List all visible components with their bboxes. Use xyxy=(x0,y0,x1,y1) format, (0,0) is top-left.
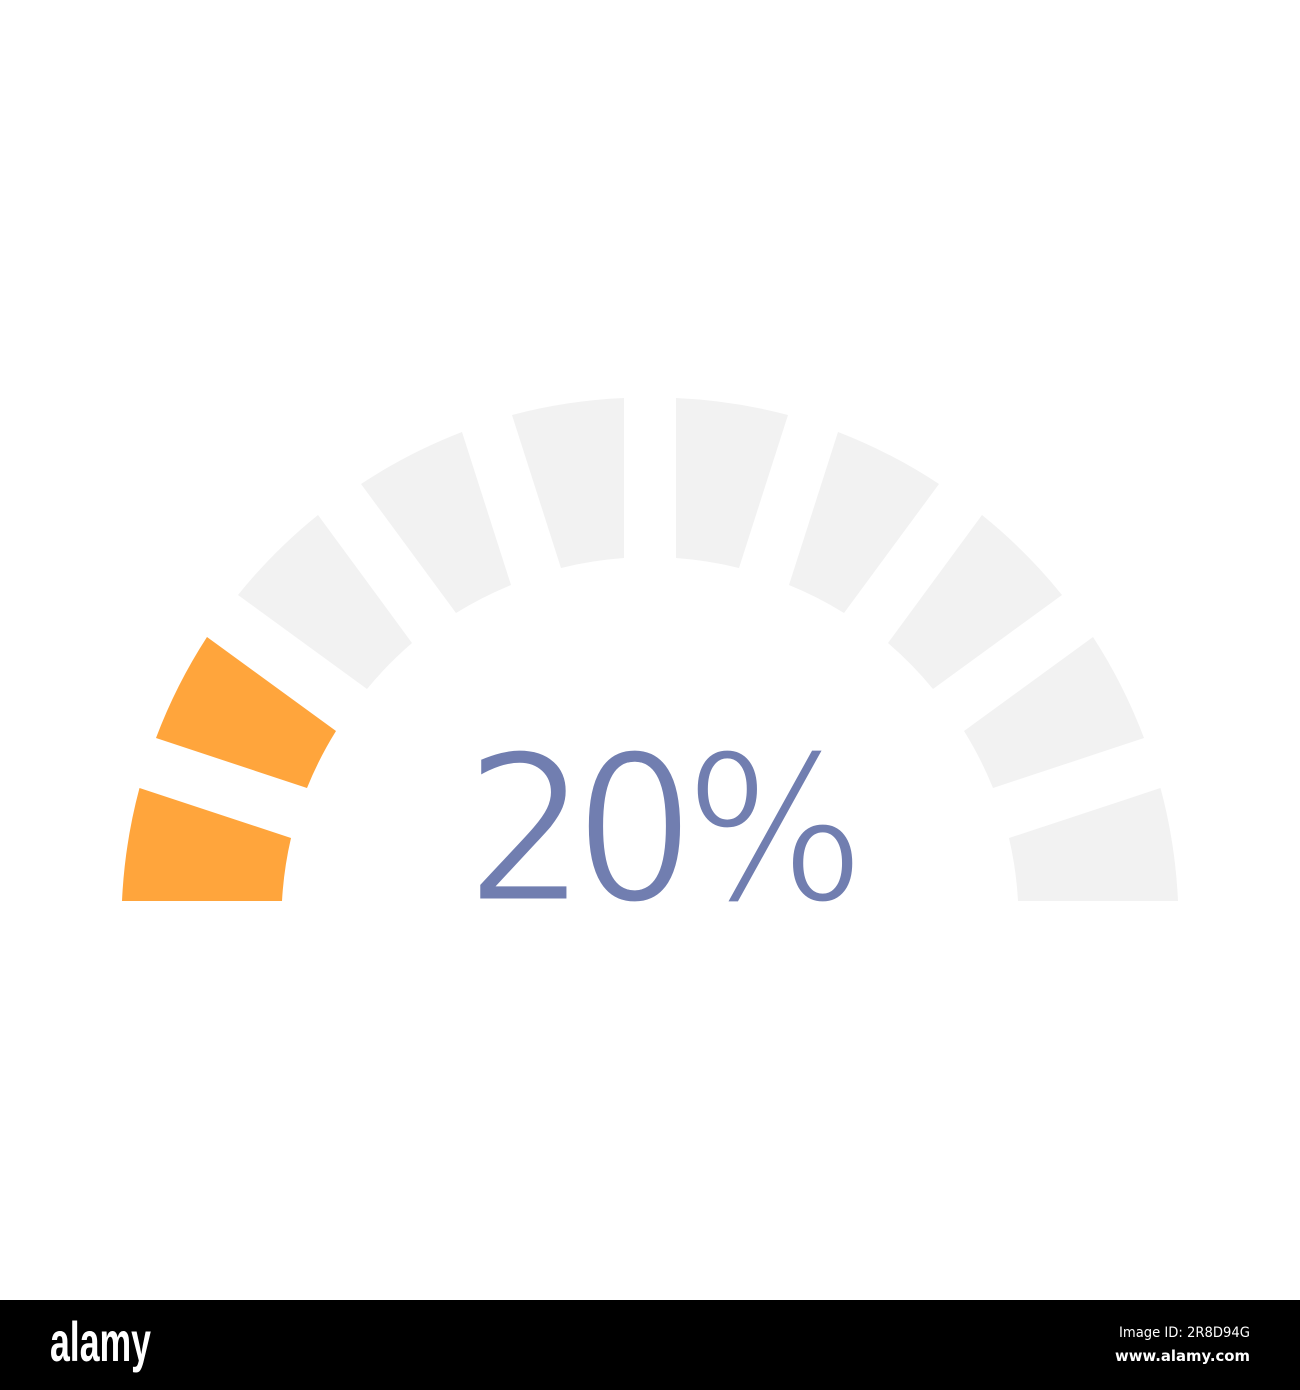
semicircular gauge xyxy=(122,398,1178,901)
website: www.alamy.com xyxy=(1115,1347,1250,1365)
empty segment 5 xyxy=(512,398,624,568)
filled segment 2 xyxy=(156,637,336,788)
percentage value: 2 xyxy=(464,710,588,950)
watermark logo: alamy xyxy=(50,1310,151,1373)
percentage value: 0 xyxy=(574,710,695,950)
empty segment 6 xyxy=(676,398,788,568)
empty segment 3 xyxy=(238,515,412,689)
empty segment 8 xyxy=(888,515,1062,689)
filled segment 1 xyxy=(122,788,291,901)
percentage value: % xyxy=(685,710,865,950)
empty segment 10 xyxy=(1009,788,1178,901)
empty segment 9 xyxy=(964,637,1144,788)
percentage value xyxy=(464,710,865,950)
empty segment 7 xyxy=(789,432,939,613)
empty segment 4 xyxy=(361,432,511,613)
footer bar xyxy=(0,1300,1300,1390)
image id: Image ID: 2R8D94G xyxy=(1119,1325,1250,1341)
